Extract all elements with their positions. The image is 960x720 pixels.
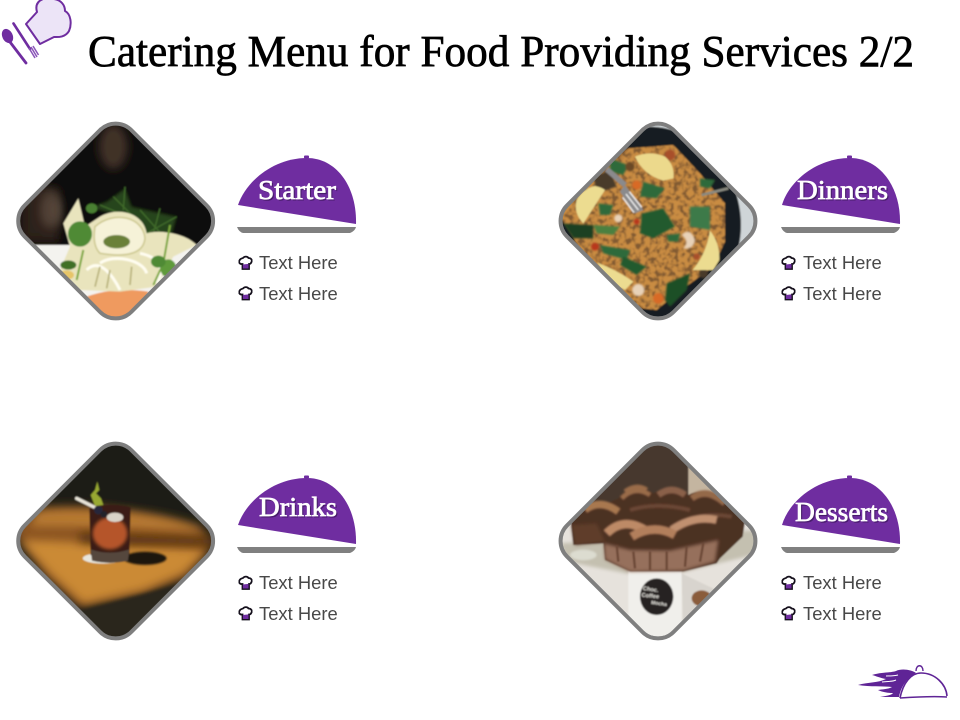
cloche: Drinks [237,476,356,553]
cloche: Drinks: Drinks [259,492,337,522]
photo: chocolate cupcakes in diamond frame: Mocha [651,600,667,608]
cloche: Desserts [781,476,900,553]
list: drinks items: Text Here [259,603,338,624]
list: desserts items: Text Here [803,572,882,593]
panel: drinks [16,442,356,640]
panel: starter [16,122,356,320]
cloche: Desserts: Desserts [796,498,890,528]
photo: starter salad in diamond frame [16,122,216,320]
cloche: Drinks: Drinks [260,494,338,524]
photo: chocolate cupcakes in diamond frame: Choc. [642,586,659,594]
list: starter items: Text Here [259,252,338,273]
title: Catering Menu for Food Providing Services 2/2 [88,26,914,76]
photo: chocolate cupcakes in diamond frame [558,442,758,640]
cloche: Starter [237,156,356,233]
photo: cocktail on wooden table in diamond frame [16,442,216,640]
list: drinks items [239,572,338,624]
cloche: Desserts: Desserts [795,497,888,527]
icon: chef hat with spoon, knife and fork [0,0,71,63]
list: desserts items [782,572,882,624]
cloche: Dinners: Dinners [798,176,890,206]
cloche: Starter: Starter [260,176,338,206]
icon: flaming cloche logo [858,666,947,698]
cloche: Dinners [781,156,900,233]
panel: desserts [558,442,900,640]
photo: chocolate cupcakes in diamond frame: Coffee [641,593,659,600]
list: dinners items: Text Here [803,283,882,304]
panel: dinners [558,122,900,320]
cloche: Dinners: Dinners [797,175,888,205]
list: starter items: Text Here [259,283,338,304]
cloche: Starter: Starter [258,175,336,205]
list: dinners items: Text Here [803,252,882,273]
list: desserts items: Text Here [803,603,882,624]
list: starter items [239,252,338,304]
list: drinks items: Text Here [259,572,338,593]
list: dinners items [782,252,882,304]
photo: rice dish in diamond frame [558,122,758,320]
